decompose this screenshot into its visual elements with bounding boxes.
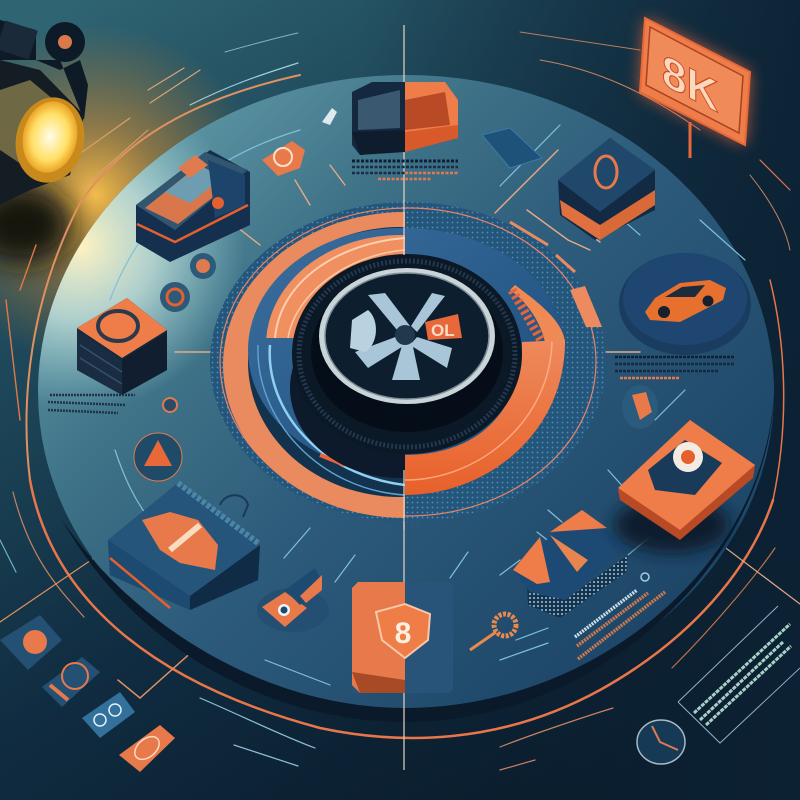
- left text block: [48, 395, 135, 413]
- icon: blue ring badge: [42, 657, 100, 707]
- shield block bottom center: 8: [395, 617, 411, 650]
- right text block: [615, 357, 735, 378]
- orange tag: [425, 314, 462, 340]
- icon: orange circle badge: [134, 433, 182, 481]
- vertical axis line: [403, 25, 405, 770]
- gear key icon: [470, 614, 516, 650]
- caliper: [350, 310, 376, 352]
- icon: blue diamond coin: [0, 615, 62, 670]
- tire: [292, 254, 522, 454]
- top center text block: [352, 161, 458, 179]
- lock icon: [257, 568, 329, 632]
- disc dark lower edge: [62, 392, 774, 722]
- right orange slanted blocks: [510, 222, 602, 327]
- rim: [319, 268, 495, 404]
- light arcs: [258, 238, 405, 495]
- camera shadow: [0, 185, 72, 265]
- small badge right: [622, 385, 658, 429]
- bottom right text panel: [678, 606, 800, 743]
- bag caption text block: [575, 590, 665, 659]
- top center box: [352, 82, 458, 155]
- icon: orange target badge: [262, 141, 305, 176]
- left blue stack: [248, 227, 405, 497]
- icon: blue link badge: [82, 692, 135, 738]
- right upper orange segment with hatching: [510, 285, 565, 342]
- orange tag: OL: [431, 321, 455, 340]
- car disc: [619, 253, 751, 355]
- icon: small badges left: [160, 253, 216, 312]
- 8K sign: 8K: [662, 44, 718, 122]
- car: [645, 280, 726, 322]
- dotted ring: [210, 202, 606, 522]
- central dial: [210, 202, 606, 522]
- repaint axis over dial: [403, 200, 405, 530]
- spokes: [355, 293, 452, 380]
- inner disc orbit lines: [110, 125, 745, 685]
- camera: [0, 20, 92, 205]
- right upper blue band: [405, 228, 564, 455]
- left box: [77, 298, 167, 395]
- right orange box: [614, 420, 755, 553]
- suitcase bottom left: [108, 483, 260, 610]
- upper left orange band: [266, 235, 405, 338]
- hub: [395, 325, 415, 345]
- top right box: [558, 138, 655, 240]
- tire shadow: [290, 368, 405, 478]
- clock icon: [637, 720, 685, 764]
- 8K sign: [640, 18, 750, 158]
- right lower orange band: [405, 340, 565, 495]
- lower left icons: [0, 615, 175, 772]
- small droplet icon: [641, 573, 649, 581]
- connector lines: [175, 150, 640, 352]
- shield block bottom center: [352, 582, 453, 693]
- icon: orange badge: [119, 725, 175, 772]
- bag bottom right: [513, 510, 628, 618]
- camera lens: [8, 91, 92, 189]
- toolbox top left: [136, 150, 250, 262]
- mesh icon: [482, 128, 542, 168]
- small wrench icon: [322, 108, 337, 125]
- icon: small gear: [163, 398, 177, 412]
- main disc: [38, 75, 774, 722]
- left salmon band: [223, 212, 405, 518]
